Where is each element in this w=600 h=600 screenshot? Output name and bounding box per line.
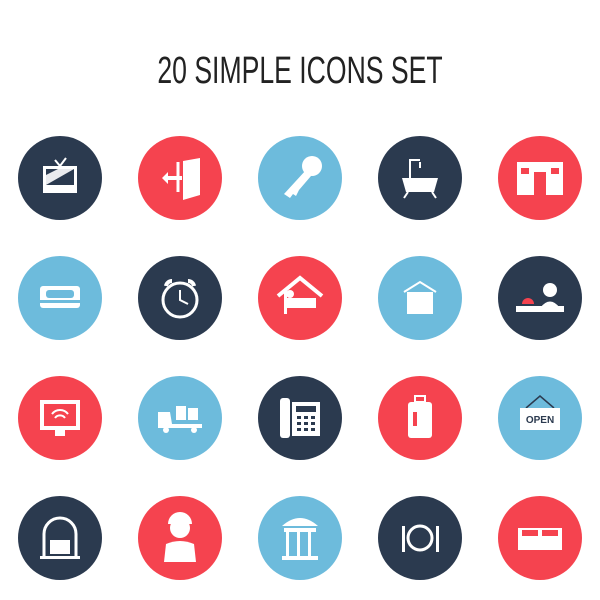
icon: key bbox=[258, 136, 342, 220]
icon: double bed bbox=[498, 496, 582, 580]
icon: monitor wifi bbox=[18, 376, 102, 460]
icon: truck bbox=[138, 376, 222, 460]
icon: towel bbox=[378, 256, 462, 340]
icon: hotel building bbox=[498, 136, 582, 220]
icon: open sign bbox=[498, 376, 582, 460]
icon: alarm clock bbox=[138, 256, 222, 340]
icon: luggage trolley bbox=[18, 496, 102, 580]
icon: bellboy bbox=[138, 496, 222, 580]
icon: phone bbox=[258, 376, 342, 460]
icon: bed bbox=[18, 256, 102, 340]
icon: bathtub bbox=[378, 136, 462, 220]
icon: gazebo bbox=[258, 496, 342, 580]
icon: house bed bbox=[258, 256, 342, 340]
icon: open sign: OPEN bbox=[526, 415, 554, 426]
icon: exit door bbox=[138, 136, 222, 220]
icon: plate cutlery bbox=[378, 496, 462, 580]
icon: tv bbox=[18, 136, 102, 220]
icon: receptionist bbox=[498, 256, 582, 340]
icon: suitcase bbox=[378, 376, 462, 460]
title: 20 SIMPLE ICONS SET bbox=[157, 50, 443, 92]
